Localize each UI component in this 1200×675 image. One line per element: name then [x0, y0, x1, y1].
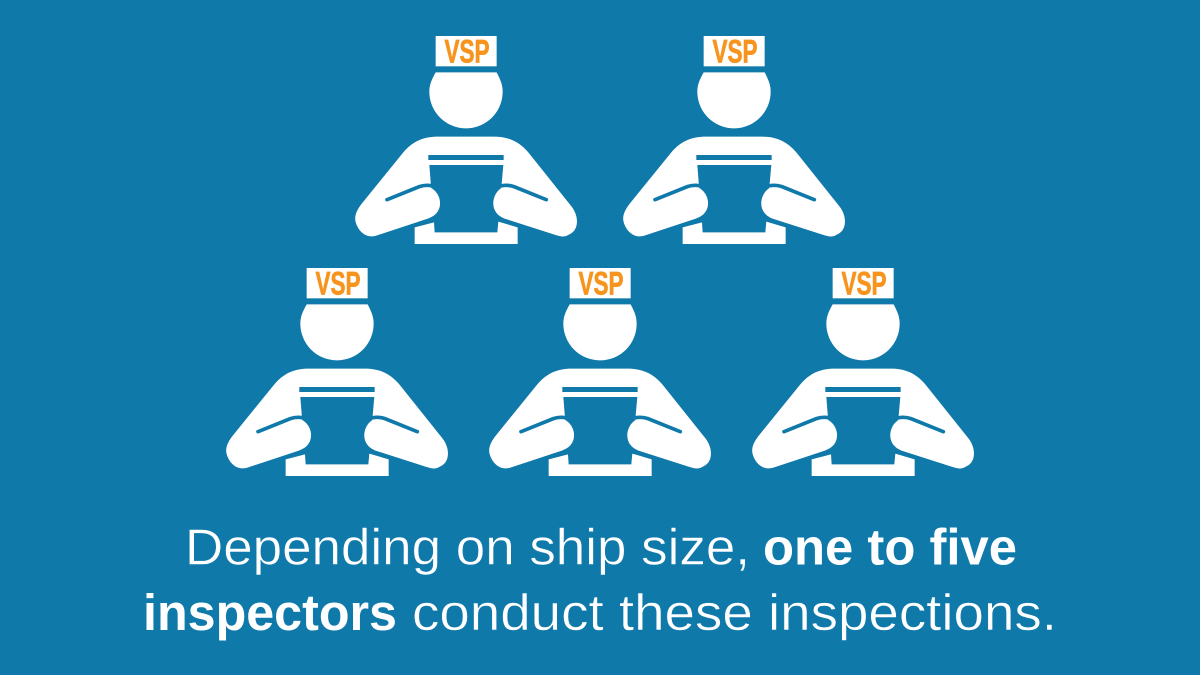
VSP cap label: VSP [316, 266, 360, 302]
caption text [143, 518, 1057, 641]
caption text: inspectors [143, 584, 397, 641]
VSP cap label: VSP [842, 266, 886, 302]
inspector figure: top row right [623, 34, 845, 244]
VSP cap label: VSP [578, 266, 624, 302]
caption text: one to five [763, 518, 1017, 576]
VSP cap label: VSP [712, 34, 758, 70]
inspector figure: top row left [355, 34, 577, 244]
caption text: Depending on ship size, [185, 518, 750, 576]
inspector figure: bottom row right [752, 266, 974, 476]
caption text: conduct these inspections. [412, 584, 1057, 641]
inspector figure: bottom row centre [489, 266, 711, 476]
VSP cap label: VSP [444, 34, 490, 70]
inspector figure: bottom row left [226, 266, 448, 476]
